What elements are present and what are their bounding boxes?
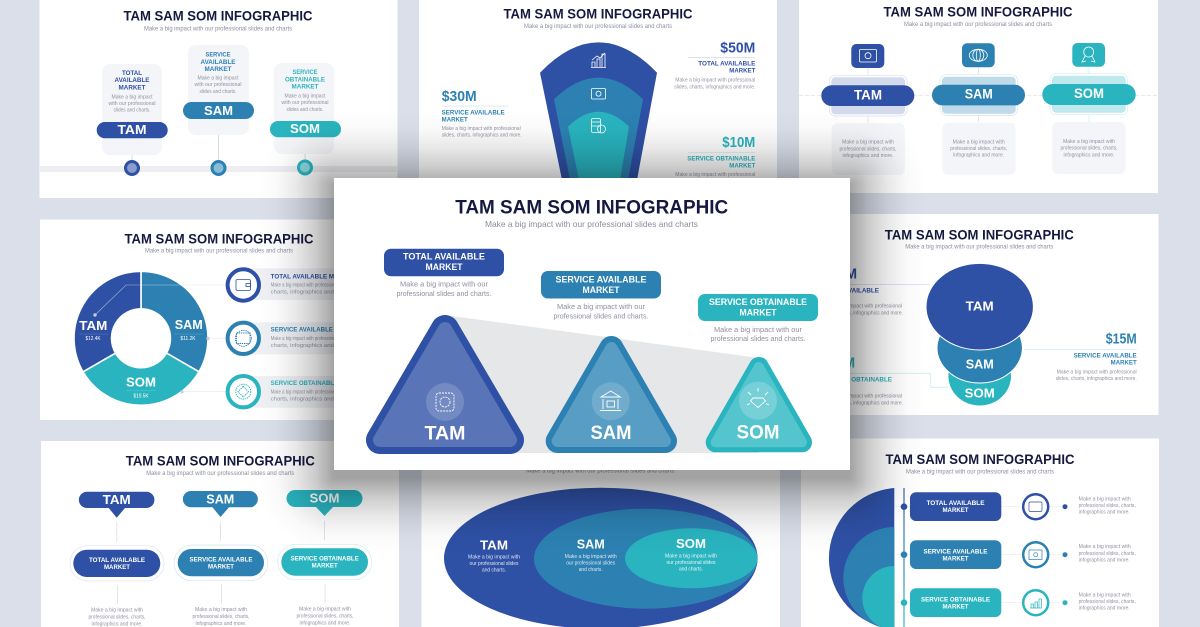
row: TAM legend: charts, infographics and more.: [271, 290, 351, 296]
row: TAM legend: TOTAL AVAILABLE MARKET: [271, 274, 356, 280]
stacked circles chart: SOM: [965, 385, 995, 400]
subheading: Make a big impact with our professional slides and charts: [526, 469, 674, 475]
label: SAM: Make a big impact with: [565, 554, 617, 560]
subheading: Make a big impact with our professional slides and charts: [146, 471, 294, 477]
column: SOM: SOM: [1074, 86, 1104, 101]
row: SOM legend: Make a big impact with professional slides,: [271, 390, 351, 396]
left stat: TAM: Make a big impact with professional: [822, 304, 902, 310]
icon: diamond: [747, 388, 769, 408]
label: TAM: Make a big impact with: [468, 555, 520, 561]
panel: nested ellipses slide: [422, 450, 780, 627]
card: SAM: Make a big impact: [198, 75, 239, 81]
column: TAM: professional slides, charts,: [840, 146, 896, 152]
row: TAM: TOTAL AVAILABLE: [926, 501, 984, 507]
stat: $30M: $30M: [442, 88, 477, 105]
card: SAM: slides and charts.: [200, 89, 236, 95]
card: TAM: MARKET: [118, 85, 146, 91]
icon: chip: [236, 384, 251, 399]
row: SAM legend: charts, infographics and more.: [271, 343, 351, 349]
row: SAM legend: Make a big impact with professional slides,: [271, 336, 351, 342]
card: TAM: TOTAL: [122, 71, 142, 77]
column: SAM: Make a big impact with: [953, 139, 1005, 145]
row: SAM: SERVICE AVAILABLE: [924, 549, 988, 555]
card: SAM: MARKET: [204, 67, 232, 73]
donut chart: $11.2K: [180, 336, 196, 342]
nested ellipses chart: [444, 488, 758, 627]
right stat: SAM: $15M: [1106, 330, 1137, 347]
column: TAM: MARKET: [104, 565, 130, 571]
subheading: Make a big impact with our professional slides and charts: [524, 24, 672, 30]
panel: speech pill slide: [41, 441, 399, 627]
heading: TAM SAM SOM INFOGRAPHIC: [885, 226, 1074, 242]
label: TAM: our professional slides: [470, 561, 519, 567]
label: SOM: SOM: [676, 536, 706, 551]
subheading: Make a big impact with our professional slides and charts: [144, 26, 292, 32]
label: service obtainable market: professional slides and charts.: [710, 336, 806, 343]
left stat: TAM: slides, charts, infographics and more.: [822, 310, 903, 316]
stacked circles chart: SAM: [966, 356, 994, 371]
stat: $50M: Make a big impact with professional: [675, 77, 755, 83]
icon: award tile: [1072, 43, 1105, 67]
column: SAM: [174, 491, 268, 627]
row: SOM: MARKET: [942, 604, 969, 610]
column: SOM: MARKET: [312, 564, 338, 570]
row: SOM: [895, 588, 1136, 617]
column: SAM: SERVICE AVAILABLE: [190, 557, 252, 563]
icon: fingerprint tile: [962, 43, 995, 67]
donut chart: $12.4K: [86, 336, 101, 342]
card: SOM: MARKET: [292, 84, 319, 90]
row: TAM: [895, 492, 1136, 521]
card: SAM: SAM: [204, 103, 233, 118]
icon: network: [235, 330, 251, 346]
row: SOM legend: charts, infographics and more.: [271, 397, 351, 403]
label: service available market: professional slides and charts.: [554, 314, 649, 320]
label: SOM: [665, 536, 717, 572]
heading: TAM SAM SOM INFOGRAPHIC: [124, 230, 314, 246]
icon: gear network: [436, 393, 454, 411]
label: service available market: Make a big impact with our: [557, 304, 646, 311]
column: SOM: [278, 490, 372, 626]
card: TAM: [97, 64, 168, 176]
triangle: SOM: [706, 357, 812, 452]
column: TAM: infographics and more.: [842, 153, 894, 159]
column: SAM: professional slides, charts,: [192, 614, 250, 620]
label: service available market: [541, 271, 661, 320]
triangle: TAM: TAM: [424, 424, 466, 445]
label: service obtainable market: [698, 294, 818, 343]
card: SOM: [270, 63, 341, 176]
label: SOM: our professional slides: [666, 560, 716, 566]
label: SOM: Make a big impact with: [665, 554, 717, 560]
stat: $30M: slides, charts, infographics and more.: [442, 133, 522, 139]
label: service available market: MARKET: [582, 285, 620, 295]
donut chart: SAM: [175, 317, 203, 332]
left stat: SOM: SERVICE OBTAINABLE: [822, 378, 892, 384]
left stat: SOM: slides, charts, infographics and more.: [822, 400, 903, 406]
row: TAM: MARKET: [942, 508, 969, 514]
row: SOM: Make a big impact with: [1079, 592, 1131, 598]
column: SAM: infographics and more.: [196, 621, 246, 627]
card: SAM: SERVICE: [206, 53, 230, 59]
stat: $50M: slides, charts, infographics and more.: [674, 84, 755, 90]
column: SAM: professional slides, charts,: [950, 146, 1007, 152]
column: TAM: [70, 492, 164, 627]
triangle: SAM: SAM: [590, 423, 632, 444]
label: service available market: SERVICE AVAILABLE: [556, 274, 646, 284]
stat: $30M: MARKET: [442, 117, 468, 123]
right stat: SAM: [1024, 330, 1137, 382]
row: SAM legend: SERVICE AVAILABLE MARKET: [271, 328, 361, 334]
row: TAM: Make a big impact with: [1079, 496, 1131, 502]
column: TAM: Make a big impact with: [91, 608, 143, 614]
label: SAM: and charts.: [579, 567, 603, 573]
heading: TAM SAM SOM INFOGRAPHIC: [124, 8, 312, 24]
grey descending backdrop: [444, 316, 759, 453]
icon: growth chart: [591, 53, 606, 68]
card: SAM: AVAILABLE: [200, 60, 236, 66]
subheading: Make a big impact with our professional slides and charts: [145, 249, 293, 255]
label: TAM: TAM: [480, 537, 508, 552]
card: TAM: TAM: [118, 122, 146, 137]
column: TAM: [821, 44, 914, 175]
column: SAM: Make a big impact with: [195, 607, 247, 613]
label: total available market: TOTAL AVAILABLE: [403, 252, 485, 262]
label: TAM: [468, 537, 520, 573]
label: SOM: and charts.: [679, 566, 703, 572]
icon: chart ring: [1023, 590, 1048, 615]
card: SOM: OBTAINABLE: [285, 78, 325, 84]
row: TAM legend: [208, 268, 370, 338]
column: SOM: Make a big impact with: [299, 606, 351, 612]
subheading: Make a big impact with our professional slides and charts: [905, 245, 1053, 251]
stat: $10M: [675, 134, 756, 178]
card: TAM: with our professional: [108, 101, 156, 107]
card: SAM: with our professional: [194, 82, 242, 88]
stat: $50M: MARKET: [729, 69, 756, 75]
card: SOM: with our professional: [282, 100, 328, 106]
heading: TAM SAM SOM INFOGRAPHIC: [455, 197, 728, 219]
funnel chart: [540, 42, 657, 180]
subheading: Make a big impact with our professional slides and charts: [485, 219, 698, 229]
stat: $30M: Make a big impact with professional: [442, 126, 521, 132]
triangle: TAM: [366, 315, 524, 454]
stat: $50M: [674, 39, 756, 90]
donut chart: TAM: [79, 318, 107, 333]
subheading: Make a big impact with our professional slides and charts: [904, 22, 1052, 28]
label: total available market: [384, 249, 504, 298]
column: SOM: SOM: [310, 491, 340, 506]
stat: $10M: $10M: [722, 134, 755, 151]
row: SOM legend: SERVICE OBTAINABLE MARKET: [271, 381, 366, 387]
heading: TAM SAM SOM INFOGRAPHIC: [126, 453, 315, 469]
row: SOM: infographics and more.: [1079, 606, 1130, 612]
icon: safe tile: [851, 44, 884, 68]
label: service obtainable market: MARKET: [740, 308, 777, 318]
card: SAM: [183, 45, 254, 176]
column: TAM: TAM: [854, 87, 882, 102]
half circles chart: [829, 488, 894, 627]
right stat: SAM: SERVICE AVAILABLE: [1074, 353, 1137, 359]
heading: TAM SAM SOM INFOGRAPHIC: [886, 451, 1074, 467]
right stat: SAM: slides, charts, infographics and more.: [1056, 376, 1137, 382]
panel: stacked circles slide: [820, 214, 1158, 415]
stat: $50M: TOTAL AVAILABLE: [698, 62, 755, 68]
row: SAM: MARKET: [942, 556, 969, 562]
label: total available market: professional slides and charts.: [396, 291, 492, 298]
panel: timeline slide: [40, 0, 398, 198]
label: SAM: SAM: [577, 537, 605, 552]
left stat: TAM: $50M: [822, 265, 857, 282]
stacked circles chart: [926, 263, 1033, 406]
left stat: TAM: [822, 265, 930, 316]
row: SOM: SERVICE OBTAINABLE: [921, 597, 990, 603]
panel: donut slide: [40, 220, 370, 420]
donut chart: SOM: [126, 374, 156, 389]
column: SOM: infographics and more.: [1064, 152, 1114, 158]
row: TAM: infographics and more.: [1079, 510, 1130, 516]
stat: $30M: [442, 88, 522, 139]
stat: $50M: $50M: [720, 39, 755, 56]
donut chart: $10.5K: [134, 393, 149, 399]
row: SAM legend: [228, 322, 370, 354]
row: SAM: [895, 540, 1136, 569]
heading: TAM SAM SOM INFOGRAPHIC: [504, 6, 692, 22]
column: SAM: SAM: [965, 87, 993, 102]
icon: wallet ring: [1023, 494, 1048, 519]
panel: half circles slide: [801, 438, 1159, 627]
card: SOM: SOM: [290, 121, 320, 136]
right stat: SAM: Make a big impact with professional: [1057, 369, 1137, 375]
icon: safe ring: [1023, 542, 1048, 567]
column: SOM: SERVICE OBTAINABLE: [291, 556, 359, 562]
column: SAM: SAM: [206, 491, 234, 506]
column: SOM: Make a big impact with: [1063, 139, 1115, 145]
row: TAM: professional slides, charts,: [1079, 503, 1136, 509]
stacked circles chart: TAM: [966, 299, 994, 314]
label: total available market: MARKET: [426, 262, 463, 272]
column: SAM: [932, 43, 1025, 175]
column: TAM: TOTAL AVAILABLE: [89, 558, 145, 564]
column: TAM: Make a big impact with: [842, 140, 894, 146]
column: SAM: MARKET: [208, 564, 234, 570]
left stat: SOM: Make a big impact with professional: [822, 394, 902, 400]
label: service obtainable market: Make a big impact with our: [714, 327, 803, 334]
label: TAM: and charts.: [482, 567, 506, 573]
column: SOM: [1042, 43, 1136, 174]
triangle: SAM: [546, 336, 677, 453]
left stat: SOM: $10M: [822, 355, 855, 372]
left stat: TAM: TOTAL AVAILABLE: [822, 288, 879, 294]
card: TAM: AVAILABLE: [114, 78, 150, 84]
row: SOM: professional slides, charts,: [1079, 599, 1136, 605]
stat: $10M: SERVICE OBTAINABLE: [687, 157, 755, 163]
stat: $10M: MARKET: [729, 164, 756, 170]
column: SOM: infographics and more.: [300, 620, 350, 626]
row: SOM legend: [182, 376, 370, 408]
triangle: SOM: SOM: [736, 422, 780, 444]
panel: pill columns slide: [799, 0, 1158, 193]
icon: safe: [592, 88, 606, 99]
card: TAM: Make a big impact: [112, 94, 153, 100]
row: SAM: professional slides, charts,: [1079, 551, 1136, 557]
row: SAM: Make a big impact with: [1079, 544, 1131, 550]
stat: $30M: SERVICE AVAILABLE: [442, 110, 505, 116]
panel: funnel slide: [419, 0, 777, 180]
column: TAM: TAM: [103, 492, 131, 507]
card: SOM: SERVICE: [292, 70, 318, 76]
label: SAM: our professional slides: [566, 561, 616, 567]
card: SOM: slides and charts.: [286, 107, 324, 113]
column: SAM: infographics and more.: [953, 153, 1004, 159]
row: TAM legend: Make a big impact with professional slides,: [271, 283, 351, 289]
donut chart: [74, 271, 225, 405]
row: SAM: infographics and more.: [1079, 557, 1130, 563]
icon: bank: [600, 391, 621, 410]
stat: $10M: Make a big impact with professional: [675, 172, 755, 178]
column: SOM: professional slides, charts,: [296, 614, 354, 620]
left stat: SOM: [822, 355, 948, 406]
column: SOM: professional slides, charts,: [1060, 146, 1118, 152]
label: SAM: [565, 537, 617, 573]
label: service obtainable market: SERVICE OBTAINABLE: [709, 297, 807, 307]
heading: TAM SAM SOM INFOGRAPHIC: [884, 4, 1072, 20]
panel: main slide: [334, 178, 850, 470]
subheading: Make a big impact with our professional slides and charts: [906, 469, 1054, 475]
column: TAM: professional slides, charts,: [88, 615, 146, 621]
icon: coins: [592, 118, 606, 133]
right stat: SAM: MARKET: [1111, 360, 1137, 366]
icon: wallet: [236, 280, 250, 290]
card: SOM: Make a big impact: [284, 94, 326, 100]
card: TAM: slides and charts.: [114, 108, 150, 114]
label: total available market: Make a big impact with our: [400, 282, 489, 289]
